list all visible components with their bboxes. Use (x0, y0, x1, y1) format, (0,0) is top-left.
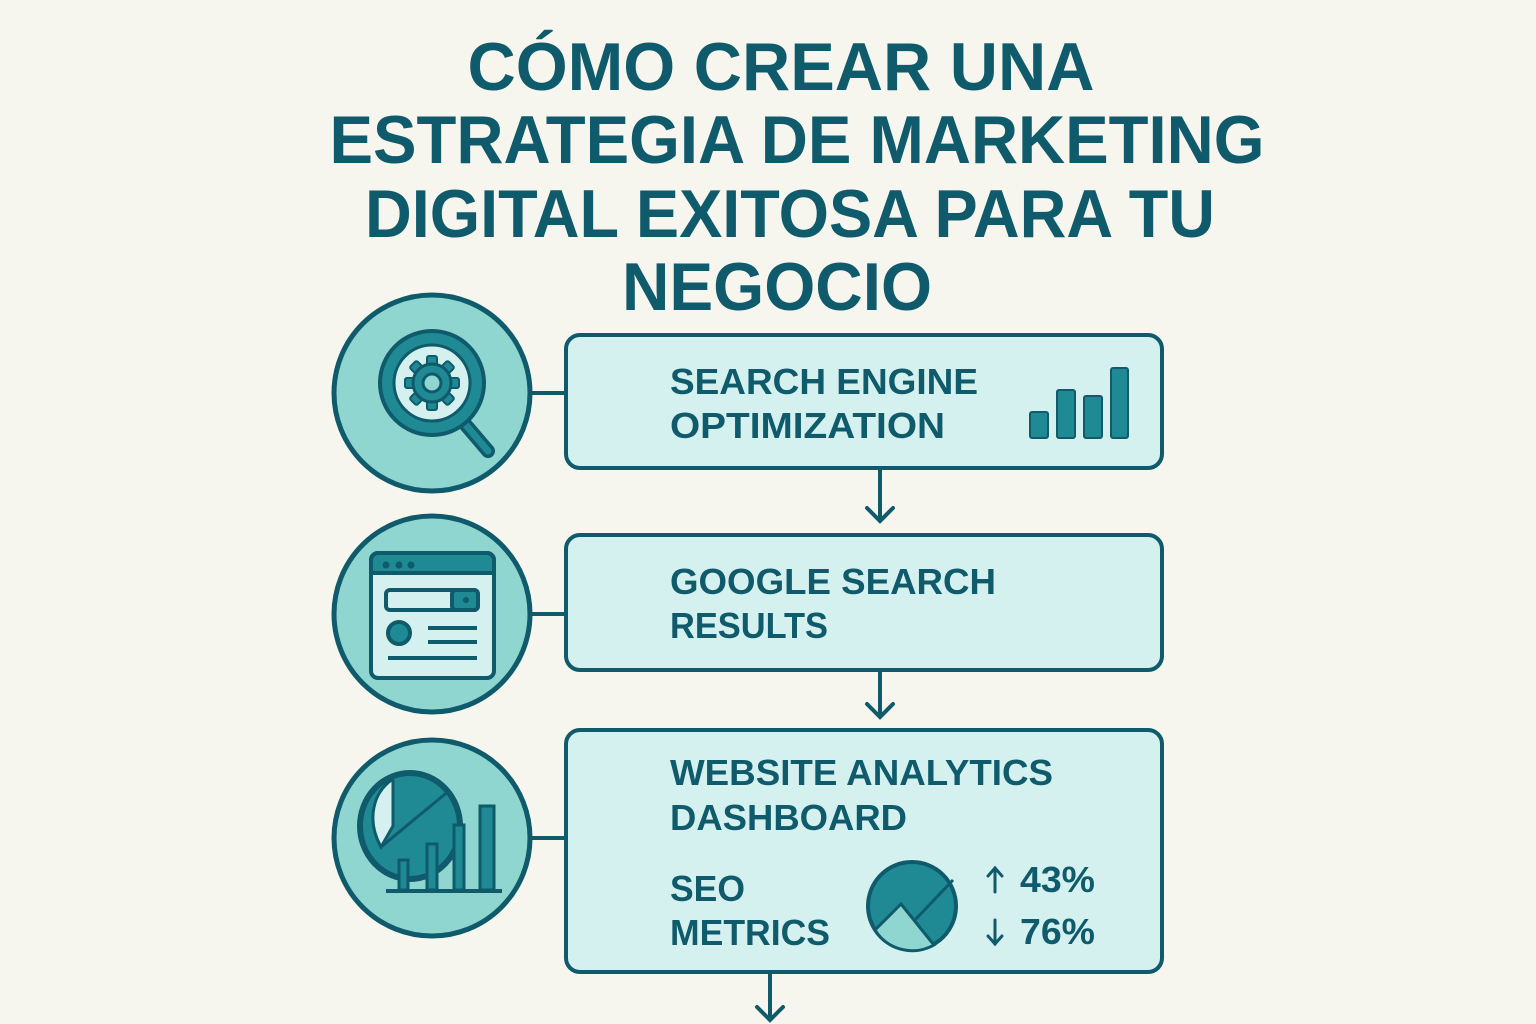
panel: analytics: WEBSITE ANALYTICS (670, 752, 1053, 793)
icon: search gear circle (334, 295, 530, 491)
panel: analytics: METRICS (670, 912, 830, 953)
metrics: 76% (1020, 911, 1095, 952)
title (330, 29, 1264, 325)
arrow (867, 672, 893, 717)
panel: Google search: GOOGLE SEARCH (670, 561, 996, 602)
title: CÓMO CREAR UNA (468, 29, 1094, 105)
icon: analytics circle (334, 740, 530, 936)
panel: SEO: OPTIMIZATION (670, 405, 945, 446)
title: ESTRATEGIA DE MARKETING (330, 102, 1264, 178)
panel: SEO: SEARCH ENGINE (670, 361, 978, 402)
panel: SEO (566, 335, 1162, 468)
arrow (867, 470, 893, 521)
metrics: 43% (1020, 859, 1095, 900)
title: NEGOCIO (622, 249, 932, 325)
icon: browser circle (334, 516, 530, 712)
metrics (988, 859, 1095, 952)
title: DIGITAL EXITOSA PARA TU (365, 176, 1215, 252)
panel: Google search (566, 535, 1162, 670)
panel: analytics: DASHBOARD (670, 797, 907, 838)
panel: analytics: SEO (670, 868, 745, 909)
panel: analytics (566, 730, 1162, 972)
pie chart (868, 862, 956, 951)
bar chart (1030, 368, 1128, 438)
arrow (757, 974, 783, 1020)
connector lines (528, 393, 567, 838)
panel: Google search: RESULTS (670, 605, 828, 646)
